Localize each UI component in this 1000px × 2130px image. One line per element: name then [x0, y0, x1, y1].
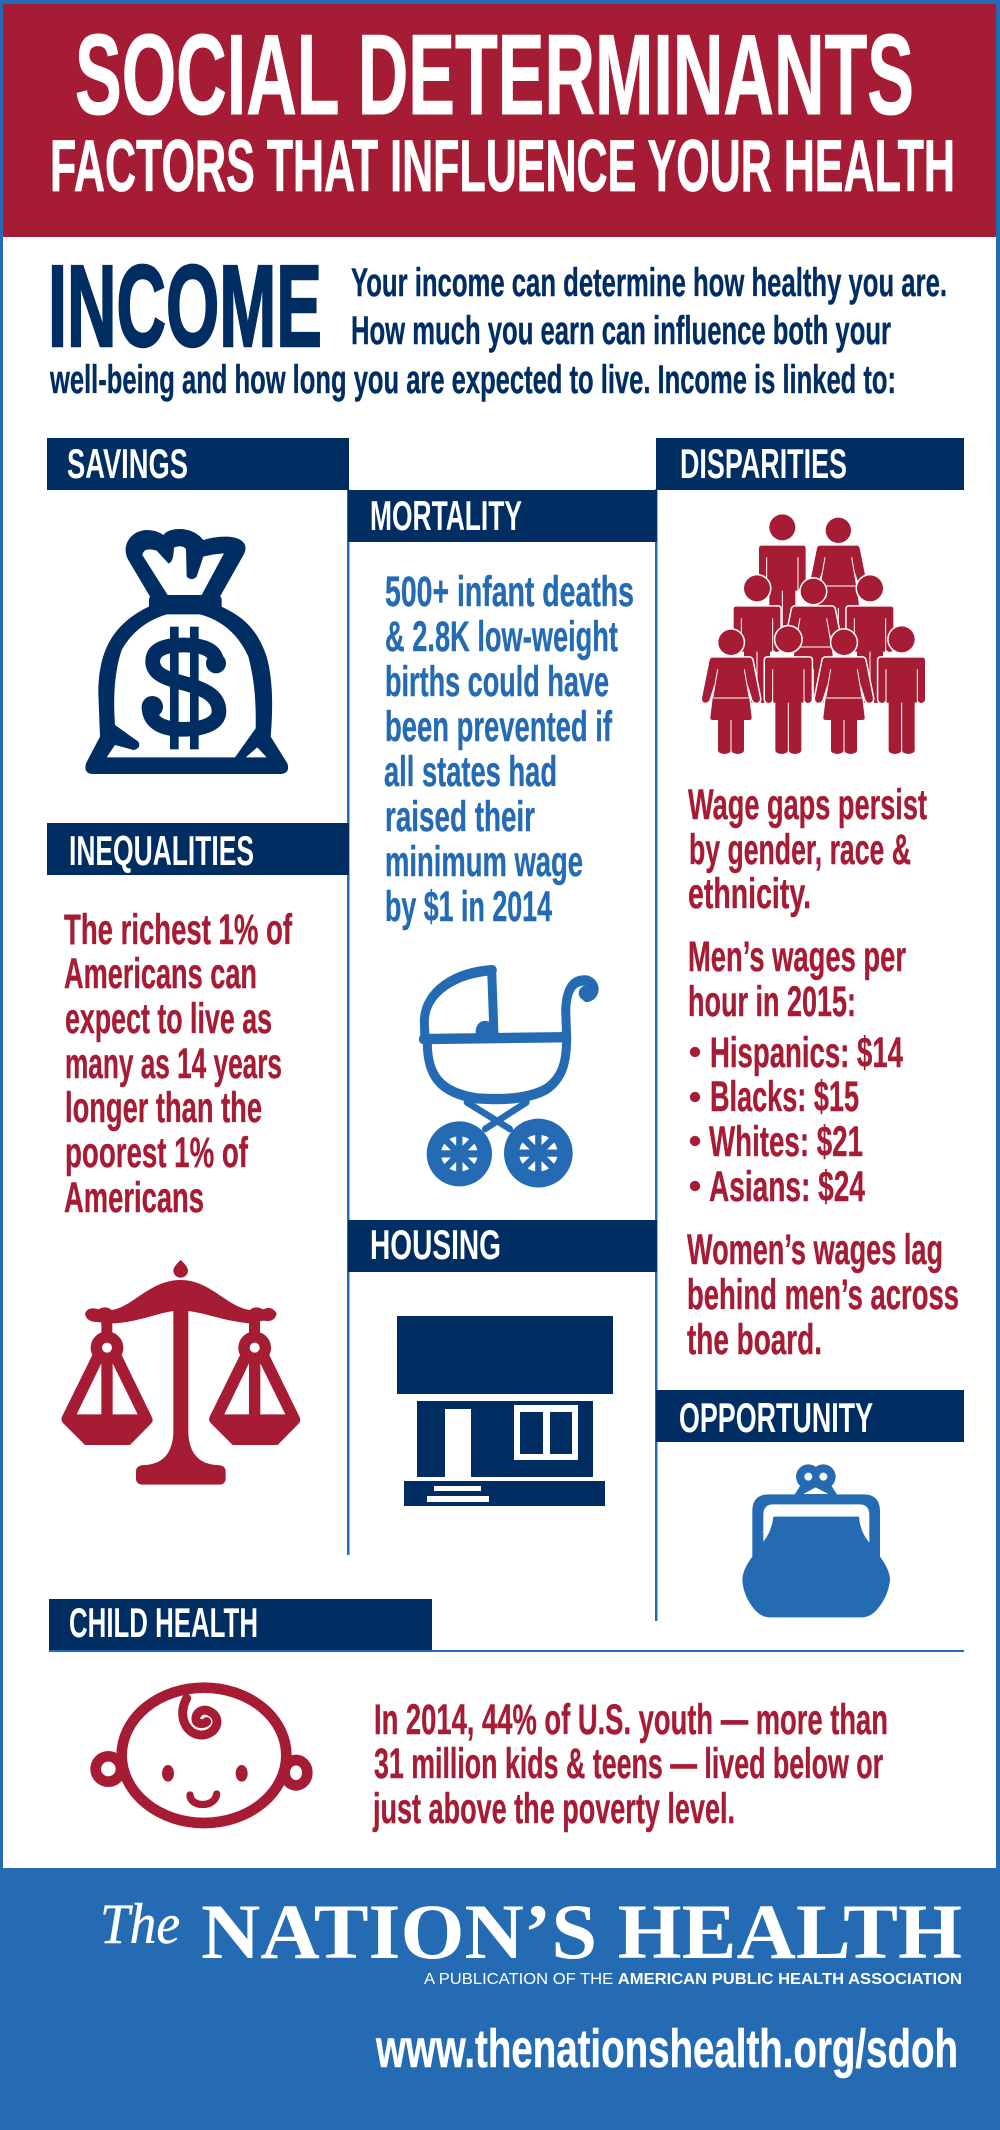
text: richest 1 percent: The richest 1% of [64, 906, 292, 954]
intro: income [48, 241, 947, 402]
icon: baby face [96, 1688, 307, 1823]
text: infant deaths [384, 568, 634, 931]
text: child poverty: just above the poverty level. [372, 1785, 735, 1833]
text: infant deaths: by $1 in 2014 [385, 883, 552, 931]
logo: The Nation's Health: NATION’S HEALTH [201, 1888, 962, 1975]
panel: disparities [656, 438, 964, 1364]
text: infant deaths: births could have [385, 658, 609, 706]
panel: child health [49, 1599, 964, 1833]
text: infant deaths: been prevented if [385, 703, 612, 751]
panel: savings [47, 438, 349, 774]
text: wage gaps: Asians: $24 [709, 1163, 865, 1211]
text: wage gaps: the board. [687, 1316, 822, 1364]
panel: savings: SAVINGS [67, 440, 188, 487]
text: richest 1 percent: Americans [64, 1174, 204, 1222]
icon: baby stroller [423, 970, 595, 1188]
text: wage gaps [687, 781, 959, 1364]
text: child poverty [372, 1696, 888, 1833]
panel: opportunity: OPPORTUNITY [679, 1394, 873, 1441]
tagline: A PUBLICATION OF THE AMERICAN PUBLIC HEALTH ASSOCIATION [424, 1971, 962, 1988]
icon: money bag [85, 529, 288, 774]
panel: opportunity [656, 1390, 964, 1617]
panel: child health: CHILD HEALTH [69, 1599, 258, 1646]
icon: coin purse [742, 1464, 890, 1617]
column dividers [347, 489, 658, 1621]
panel: inequalities: INEQUALITIES [69, 827, 254, 874]
panel: housing [348, 1220, 657, 1506]
text: richest 1 percent: many as 14 years [65, 1040, 282, 1088]
text: richest 1 percent: longer than the [65, 1084, 262, 1132]
panel: housing: HOUSING [370, 1221, 501, 1268]
panel: inequalities [47, 823, 349, 1485]
panel: mortality: MORTALITY [370, 492, 522, 539]
icon: house [397, 1316, 613, 1506]
panel: mortality [348, 490, 657, 1188]
text: richest 1 percent [64, 906, 292, 1222]
text: infant deaths: all states had [384, 748, 557, 796]
panel: disparities: DISPARITIES [680, 440, 847, 487]
icon: scales [61, 1260, 300, 1485]
intro: income: INCOME [48, 241, 322, 371]
text: infant deaths: minimum wage [385, 838, 583, 886]
text: wage gaps: ethnicity. [688, 870, 811, 918]
icon: group of people [702, 514, 925, 754]
text: richest 1 percent: poorest 1% of [65, 1129, 248, 1177]
text: wage gaps: Blacks: $15 [710, 1073, 859, 1121]
text: wage gaps: Whites: $21 [709, 1118, 863, 1166]
text: richest 1 percent: expect to live as [65, 995, 272, 1043]
text: wage gaps: hour in 2015: [688, 978, 856, 1026]
text: infant deaths: & 2.8K low-weight [385, 613, 618, 661]
logo: The Nation's Health: The [100, 1893, 180, 1956]
title banner [3, 4, 996, 237]
footer [0, 1868, 1000, 2130]
text: infant deaths: 500+ infant deaths [385, 568, 634, 616]
text: infant deaths: raised their [385, 793, 535, 841]
text: richest 1 percent: Americans can [64, 950, 257, 998]
